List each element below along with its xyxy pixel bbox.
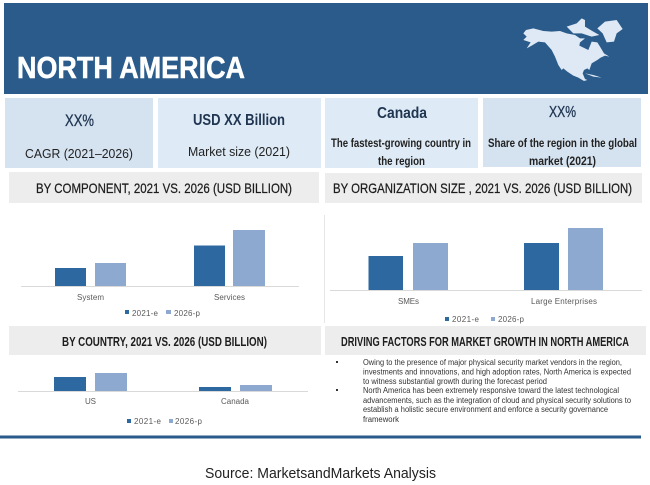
stat card: regional share: XX% [549,104,576,121]
bar chart: by component: Services [214,293,245,302]
stat card: CAGR [5,98,153,168]
legend: 2021-e [452,315,480,324]
heading: by country: BY COUNTRY, 2021 VS. 2026 (USD BILLION) [62,334,267,349]
footer rule [0,436,641,438]
text block: driving factors: framework [363,415,400,424]
text block: driving factors [336,358,632,424]
bar chart: by component [21,230,299,318]
heading: by component: BY COMPONENT, 2021 VS. 2026 (USD BILLION) [36,180,292,196]
stat card: fastest-growing country [325,98,478,168]
stat card: fastest-growing country: The fastest-growing country in [331,136,471,150]
text block: driving factors: establish a holistic secure environment and enforce a security governance [363,405,609,414]
bar chart: by country [18,373,308,426]
bar chart: by organization size: SMEs [398,297,419,306]
source note: Source: MarketsandMarkets Analysis [205,465,436,482]
legend [127,417,203,426]
stat card: CAGR: CAGR (2021–2026) [25,146,133,161]
legend [125,309,201,318]
text block: driving factors: to witness substantial growth during the forecast period [363,377,547,386]
bar chart: by organization size [324,215,642,324]
heading: driving factors [325,326,646,355]
legend [445,315,525,324]
heading: by organization size [325,173,642,203]
stat card: regional share [483,98,641,168]
text block: driving factors: advancements, such as the integration of cloud and physical security solutions to [363,396,632,405]
legend: 2021-e [132,309,159,318]
bar chart: by country: US [85,397,96,406]
text block: driving factors: North America has been extremely responsive toward the latest technological [363,386,619,395]
stat card: market size [158,98,321,168]
stat card: fastest-growing country: Canada [377,105,427,122]
bar chart: by component: System [77,293,104,302]
stat card: regional share: market (2021) [529,154,596,168]
legend: 2026-p [175,417,203,426]
legend: 2021-e [134,417,162,426]
bar chart: by organization size: Large Enterprises [531,297,597,306]
legend: 2026-p [174,309,201,318]
text block: driving factors: investments and innovations, and high adoption rates, North America is expected [363,368,631,376]
icon: North America map [523,18,623,81]
stat card: market size: Market size (2021) [188,144,290,159]
stat card: market size: USD XX Billion [193,112,285,129]
title: NORTH AMERICA [17,50,245,85]
stat card: fastest-growing country: the region [378,154,425,168]
header banner [4,3,648,94]
legend: 2026-p [498,315,525,324]
heading: by component [9,172,319,203]
stat card: CAGR: XX% [65,111,94,130]
bar chart: by country: Canada [221,397,250,406]
text block: driving factors: Owing to the presence of major physical security market vendors in the region, [363,358,622,367]
heading: by country [9,326,321,355]
